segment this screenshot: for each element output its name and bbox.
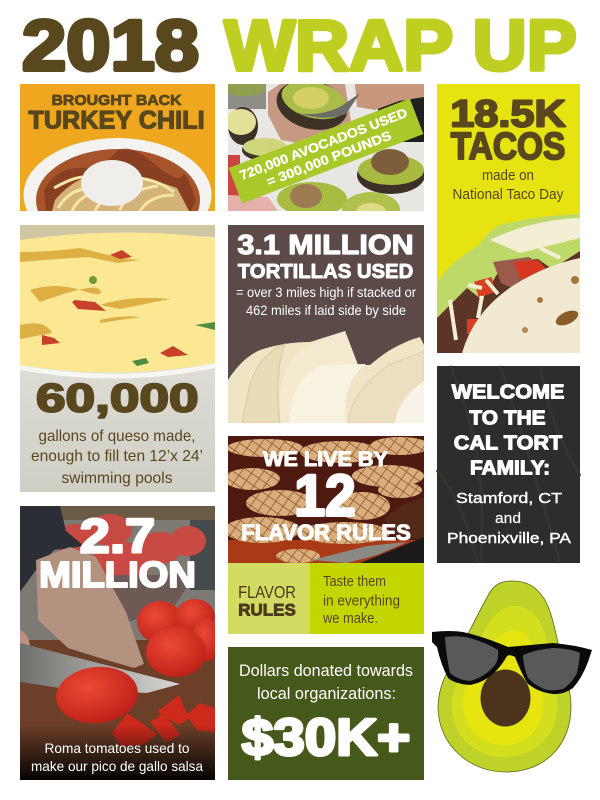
panel: welcome: Phoenixville, PA <box>447 530 571 547</box>
panel: donations: $30K+ <box>242 708 410 766</box>
panel: welcome: and <box>495 510 521 527</box>
banner: avocados used: 720,000 AVOCADOS USED <box>237 105 409 183</box>
stat: 60,000 gallons of queso <box>31 375 203 487</box>
stat: 3.1 million tortillas: 3.1 MILLION <box>237 229 414 261</box>
heading: brought back turkey chili: TURKEY CHILI <box>28 107 205 135</box>
panel: donations: local organizations: <box>257 684 396 703</box>
panel: turkey chili <box>20 84 215 211</box>
panel: taste them: in everything <box>323 594 400 610</box>
stat: 18.5K tacos: National Taco Day <box>452 187 564 203</box>
panel: flavor rules logo: RULES <box>238 600 296 620</box>
panel: tortillas <box>228 225 424 423</box>
icon: avocado with sunglasses <box>432 581 592 772</box>
panel: donations: Dollars donated towards <box>239 661 413 680</box>
heading: we live by 12 flavor rules: WE LIVE BY <box>263 447 388 471</box>
stat: 3.1 million tortillas: 462 miles if laid side by side <box>246 303 406 318</box>
chili bowl illustration <box>24 138 212 211</box>
stat: 60,000 gallons of queso: 60,000 <box>36 375 199 420</box>
panel: taste them <box>310 563 424 634</box>
stat: 18.5K tacos: made on <box>482 168 534 184</box>
panel: avocados <box>228 84 424 211</box>
stat: 60,000 gallons of queso: enough to fill ten 12’x 24’ <box>31 448 203 465</box>
panel: donations <box>228 647 424 780</box>
stat: 18.5K tacos: 18.5K <box>450 92 566 135</box>
title <box>22 6 577 86</box>
stat: 2.7 million: MILLION <box>39 554 196 595</box>
stat: 3.1 million tortillas: TORTILLAS USED <box>238 261 413 283</box>
heading: brought back turkey chili: BROUGHT BACK <box>51 92 182 109</box>
panel: flavor rules photo <box>224 436 430 563</box>
banner: avocados used: = 300,000 POUNDS <box>264 128 393 189</box>
stat: 3.1 million tortillas <box>236 229 416 318</box>
panel: tacos <box>437 84 580 353</box>
stat: 60,000 gallons of queso: gallons of queso made, <box>38 428 196 445</box>
panel: welcome: CAL TORT <box>454 432 562 454</box>
stat: 60,000 gallons of queso: swimming pools <box>62 470 172 487</box>
caption: roma tomatoes: Roma tomatoes used to <box>44 740 190 756</box>
heading: we live by 12 flavor rules <box>241 447 411 545</box>
tortillas illustration <box>228 331 424 423</box>
avocado photo illustration <box>228 84 424 211</box>
caption: roma tomatoes <box>31 740 203 774</box>
caption: roma tomatoes: make our pico de gallo salsa <box>31 758 203 774</box>
panel: tomatoes <box>20 506 222 780</box>
panel: taste them: we make. <box>322 611 378 627</box>
panel: flavor rules logo: FLAVOR <box>238 583 296 602</box>
panel: flavor rules logo <box>228 563 310 634</box>
heading: brought back turkey chili <box>28 94 204 130</box>
heading: we live by 12 flavor rules: FLAVOR RULES <box>241 520 411 545</box>
panel: taste them: Taste them <box>323 574 386 590</box>
panel: welcome: FAMILY: <box>470 457 550 479</box>
panel: welcome: WELCOME <box>452 381 564 403</box>
stat: 3.1 million tortillas: = over 3 miles high if stacked or <box>236 285 416 300</box>
title: WRAP UP <box>224 7 577 86</box>
panel: welcome <box>437 366 580 563</box>
banner: avocados used <box>229 99 423 203</box>
taco illustration <box>437 214 580 353</box>
panel: welcome: TO THE <box>469 407 546 429</box>
stat: 2.7 million: 2.7 <box>80 509 155 563</box>
panel: queso <box>20 225 215 492</box>
stat: 2.7 million <box>40 518 194 588</box>
panel: welcome: Stamford, CT <box>456 490 562 507</box>
stat: 18.5K tacos <box>450 92 566 203</box>
stat: 18.5K tacos: TACOS <box>451 125 565 167</box>
grill illustration <box>224 437 430 563</box>
title: 2018 <box>22 6 199 85</box>
tomato photo illustration <box>20 506 222 780</box>
queso illustration <box>20 225 215 379</box>
heading: we live by 12 flavor rules: 12 <box>294 463 356 528</box>
